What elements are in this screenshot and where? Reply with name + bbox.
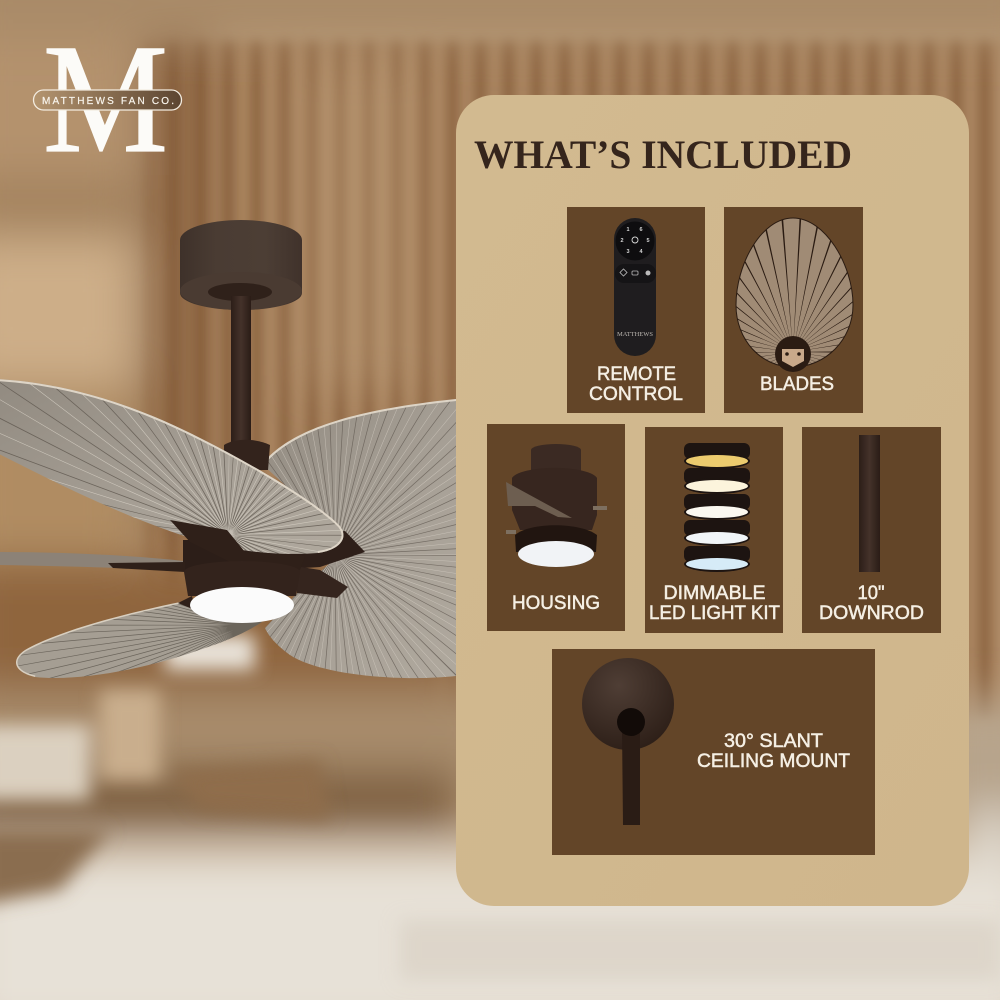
card: remote control bbox=[567, 207, 705, 413]
logo wordmark: MATTHEWS FAN CO. bbox=[42, 96, 174, 107]
card: housing bbox=[487, 424, 625, 631]
label: LED LIGHT KIT bbox=[649, 603, 780, 624]
label bbox=[819, 583, 924, 624]
label: 30° SLANT bbox=[724, 731, 823, 752]
label: 10" bbox=[858, 583, 884, 604]
canopy bbox=[180, 220, 302, 310]
icon: stacked LED colour discs bbox=[684, 443, 750, 572]
label: DOWNROD bbox=[819, 603, 924, 624]
icon: remote: MATTHEWS bbox=[617, 331, 653, 338]
downrod bbox=[231, 296, 251, 446]
blade bracket lower bbox=[295, 566, 348, 598]
icon: remote: 5 bbox=[646, 238, 650, 244]
logo letter M: M bbox=[43, 12, 168, 185]
blade bracket left bbox=[108, 562, 185, 572]
card: downrod bbox=[802, 427, 941, 633]
LED light ring bbox=[184, 561, 300, 596]
label bbox=[649, 583, 780, 624]
label: HOUSING bbox=[512, 593, 600, 614]
fan blade: top left bbox=[0, 379, 344, 554]
title: WHAT’S INCLUDED bbox=[474, 132, 852, 177]
blade bracket right bbox=[240, 531, 365, 572]
blade bracket top bbox=[170, 520, 305, 572]
ceiling fan bbox=[0, 220, 460, 745]
card: dimmable LED light kit bbox=[645, 427, 783, 633]
label: CEILING MOUNT bbox=[697, 751, 850, 772]
icon: remote: 6 bbox=[639, 227, 643, 233]
label: DIMMABLE bbox=[664, 583, 766, 604]
label bbox=[697, 731, 850, 772]
fan blade: lower left bbox=[16, 602, 262, 678]
icon: palm blade bbox=[736, 218, 854, 372]
label: CONTROL bbox=[589, 384, 683, 405]
icon: remote: 1 bbox=[626, 227, 630, 233]
icon: slant mount bbox=[582, 658, 674, 825]
motor column bbox=[183, 540, 243, 570]
icon: remote: 3 bbox=[626, 249, 630, 255]
panel: what's included bbox=[456, 95, 969, 906]
icon: housing bbox=[506, 444, 607, 567]
icon: remote bbox=[614, 218, 656, 356]
label bbox=[589, 364, 683, 405]
LED light bbox=[190, 587, 294, 623]
blade bracket lower-left bbox=[178, 596, 195, 610]
icon: remote: 2 bbox=[620, 238, 624, 244]
fan blade: right bbox=[265, 399, 456, 678]
fan blade: left edge-on bbox=[0, 552, 185, 570]
logo pill band bbox=[34, 90, 182, 110]
motor housing bbox=[224, 440, 270, 470]
label: BLADES bbox=[760, 374, 834, 395]
icon: downrod bbox=[859, 435, 880, 572]
icon: remote: 4 bbox=[639, 249, 643, 255]
card: slant ceiling mount bbox=[552, 649, 875, 855]
label: REMOTE bbox=[597, 364, 676, 385]
logo bbox=[34, 12, 182, 185]
card: blades bbox=[724, 207, 863, 413]
